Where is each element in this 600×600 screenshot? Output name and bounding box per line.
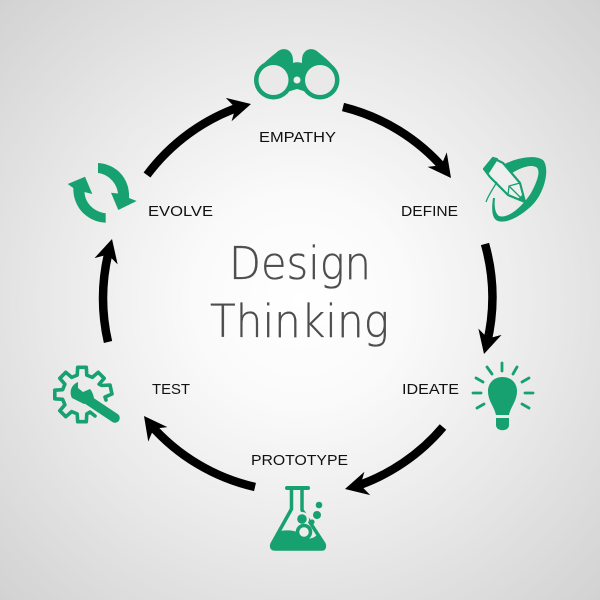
arrow: empathy to define	[343, 107, 461, 185]
label: ideate: IDEATE	[402, 381, 459, 398]
label: empathy: EMPATHY	[259, 129, 336, 146]
label: evolve: EVOLVE	[148, 203, 213, 220]
label: test: TEST	[152, 381, 190, 398]
label: prototype: PROTOTYPE	[251, 452, 348, 469]
arrow: test to evolve	[94, 236, 124, 342]
icon: light bulb	[473, 363, 533, 430]
icon: gear and wrench	[55, 367, 115, 422]
arrow: evolve to empathy	[147, 92, 254, 175]
icon: flask	[272, 488, 324, 550]
title: Design	[229, 237, 371, 290]
arrow: prototype to test	[134, 409, 255, 487]
icon: refresh arrows	[68, 163, 137, 223]
icon: binoculars	[254, 49, 340, 100]
arrow: ideate to prototype	[342, 427, 443, 501]
label: define: DEFINE	[401, 203, 458, 220]
arrow: define to ideate	[472, 244, 502, 357]
title: Thinking	[210, 295, 389, 348]
title	[210, 237, 389, 348]
icon: pencil and ellipse	[484, 157, 546, 222]
